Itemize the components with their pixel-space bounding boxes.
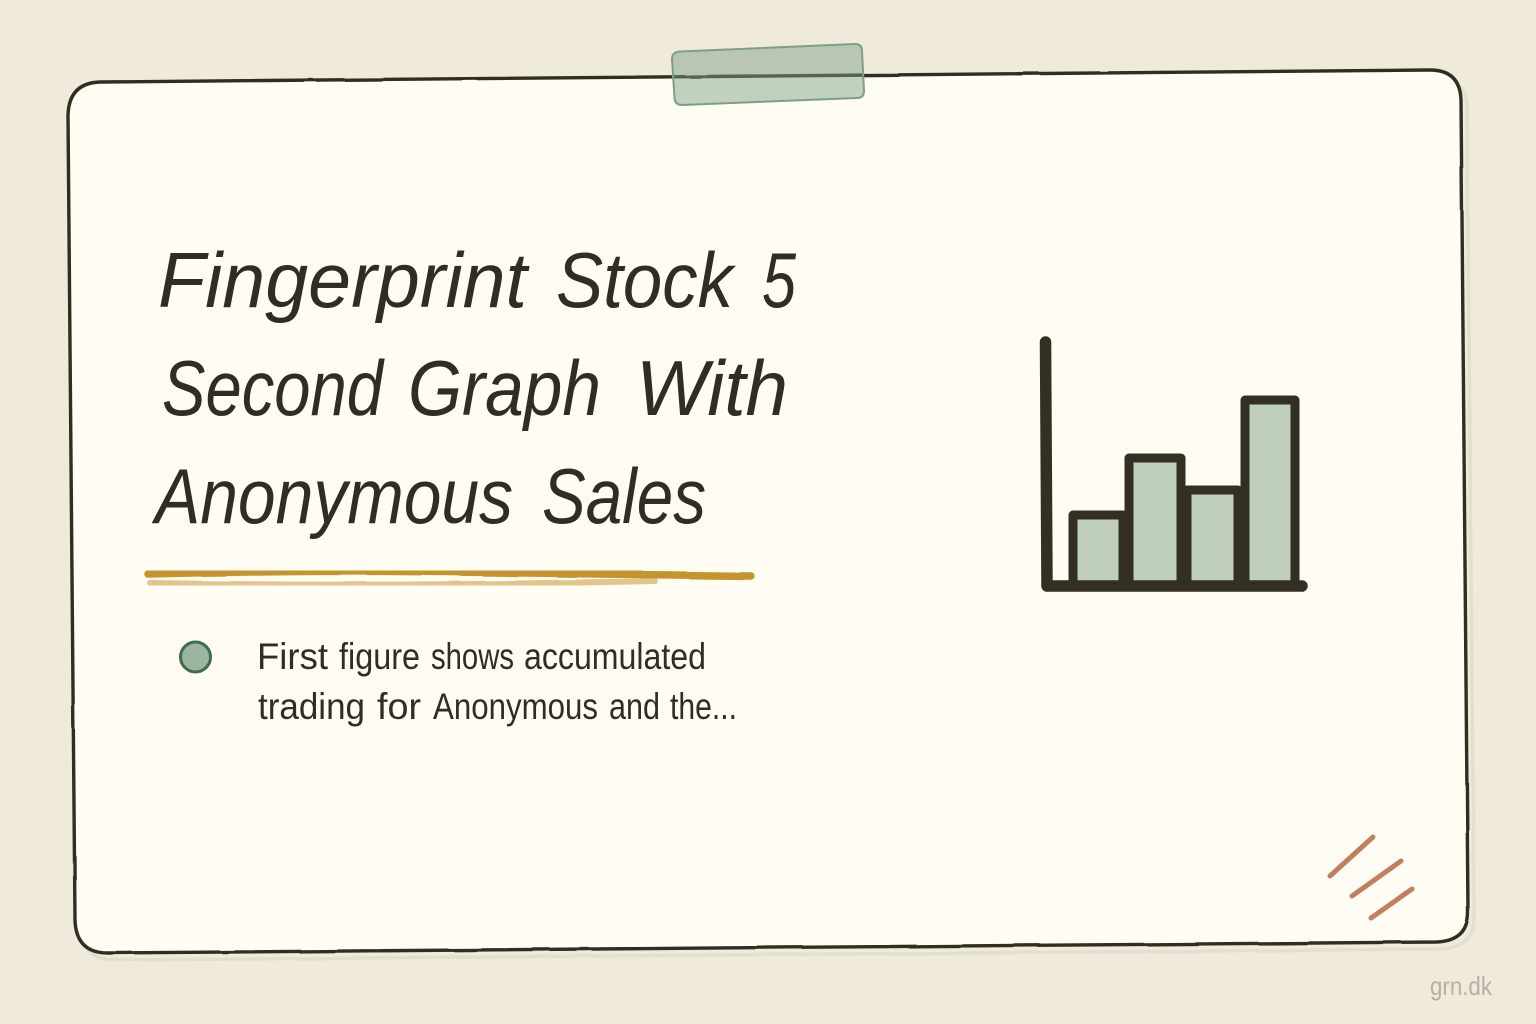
bar 2 xyxy=(1129,458,1181,586)
bullet line 1: shows xyxy=(431,636,514,677)
title line 3: Anonymous xyxy=(152,452,513,540)
bullet line 1: accumulated xyxy=(524,636,706,677)
bullet line 2: and xyxy=(609,686,660,727)
bullet line 2 xyxy=(258,686,737,727)
axes xyxy=(1046,342,1302,586)
bullet line 2: trading xyxy=(258,686,365,727)
bullet line 2: the... xyxy=(670,686,737,727)
title underline xyxy=(148,571,751,585)
title line 2: Graph xyxy=(408,344,601,432)
title line 2: With xyxy=(636,344,788,432)
watermark: grn.dk xyxy=(1430,971,1493,1001)
bar 3 xyxy=(1187,490,1238,586)
bullet line 2: Anonymous xyxy=(433,686,598,727)
decorative slashes xyxy=(1330,837,1412,918)
bullet line 1: First xyxy=(257,636,329,677)
title xyxy=(152,236,796,540)
bullet text xyxy=(257,636,737,727)
bar 1 xyxy=(1073,515,1123,586)
title line 1 xyxy=(158,236,796,324)
title line 2: Second xyxy=(162,344,385,432)
title line 1: 5 xyxy=(762,236,796,324)
tape xyxy=(672,44,864,105)
bullet line 1: figure xyxy=(339,636,420,677)
title line 3: Sales xyxy=(542,452,706,540)
bullet line 1 xyxy=(257,636,706,677)
title line 1: Stock xyxy=(556,236,737,324)
bullet dot xyxy=(180,642,210,672)
panel: card xyxy=(68,70,1474,960)
title line 1: Fingerprint xyxy=(158,236,530,324)
icon: bar chart xyxy=(1046,342,1302,586)
bullet line 2: for xyxy=(377,686,421,727)
bar 4 xyxy=(1245,400,1295,586)
title line 2 xyxy=(162,344,788,432)
